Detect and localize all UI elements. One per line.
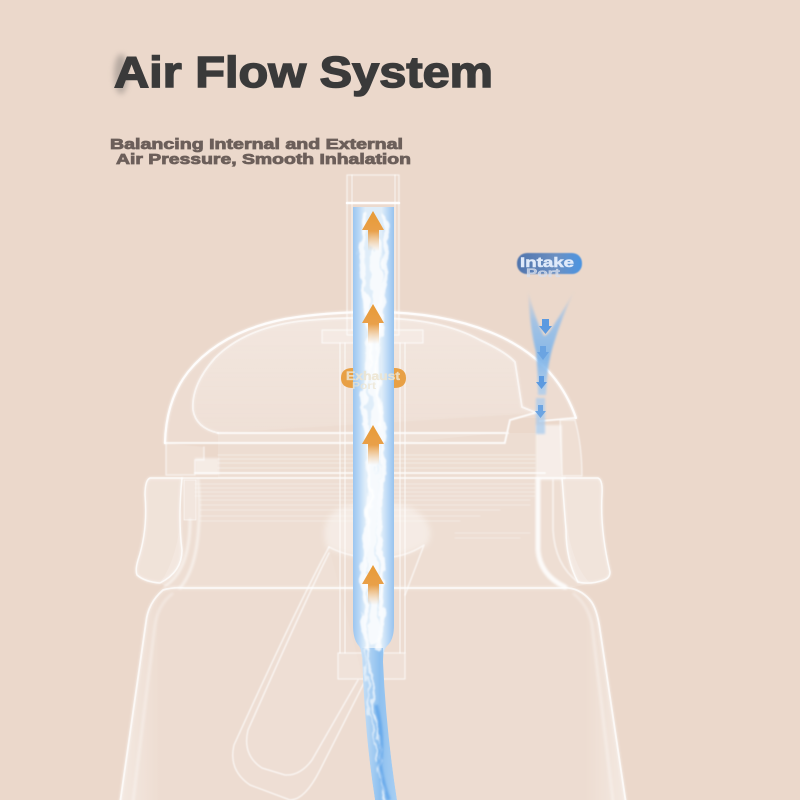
subtitle: Air Pressure, Smooth Inhalation [116,151,411,168]
airflow arrow 4 [362,565,384,605]
intake port label: Port [526,266,560,280]
intake arrow 3 [536,376,547,389]
intake arrow 1 [539,319,552,334]
exhaust port label: Port [352,381,377,392]
exhaust port label: Exhaust [346,369,400,383]
intake port label: Intake [520,254,574,270]
dome base seal [165,412,575,443]
handle strap [233,545,424,800]
right collar [562,478,610,583]
air tube [353,207,397,800]
intake air funnel [528,290,575,434]
left collar [136,478,182,583]
dome inner [193,318,537,433]
title: Air Flow System [114,48,493,97]
exhaust port label [341,368,406,392]
airflow arrow 3 [362,425,384,465]
airflow arrow 1 [362,211,384,251]
handle ring [324,502,430,558]
dome outer [166,312,576,443]
cap threads [166,420,582,480]
subtitle: Balancing Internal and External [110,136,403,153]
subtitle [110,136,411,168]
body inner contour [132,594,614,800]
intake arrow 4 [535,405,546,418]
intake port label [517,253,582,280]
neck collar band [160,478,590,588]
intake arrow 2 [537,346,549,360]
stem housing [322,175,423,679]
bottle body [119,588,627,800]
airflow arrow 2 [362,304,384,344]
bottle illustration [119,175,627,800]
